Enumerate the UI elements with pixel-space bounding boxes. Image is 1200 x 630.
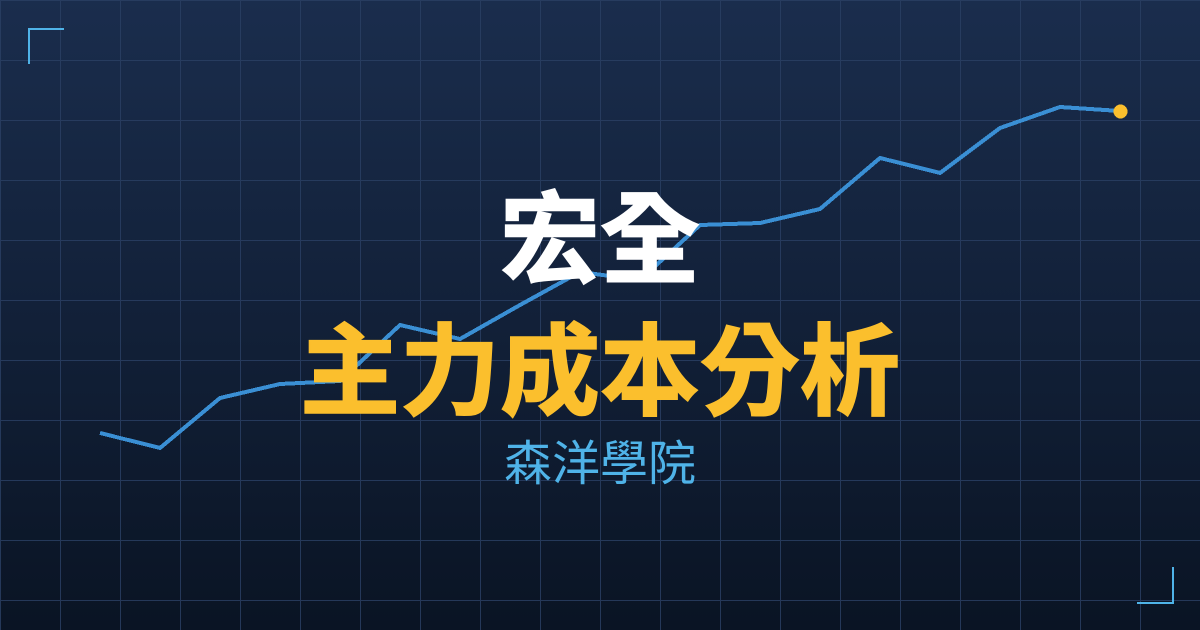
corner bracket top left (29, 29, 64, 64)
title: company name: 宏全 (500, 185, 700, 297)
corner bracket bottom right (1137, 567, 1173, 603)
end point marker (1114, 104, 1128, 118)
price line chart (100, 104, 1128, 448)
title: main cost analysis: 主力成本分析 (300, 317, 900, 429)
subtitle: brand: 森洋學院 (504, 438, 696, 491)
